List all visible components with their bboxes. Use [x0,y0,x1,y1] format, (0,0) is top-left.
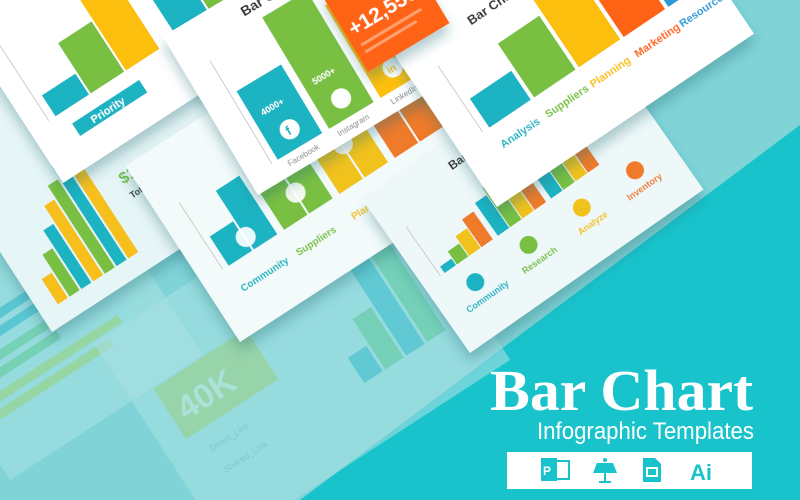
bars [42,166,138,304]
slide: community / research / analyze / inventory: Research [520,245,559,276]
faded slide: 01 02 analysis: 02 [4,232,50,278]
subtitle: Infographic Templates [537,418,754,445]
faded slide: 40K [94,243,510,500]
background: bright teal diagonal [300,125,800,500]
slide: analysis / resource stair chart: Suppliers [543,83,591,121]
slide: analysis / resource stair chart [346,0,754,207]
faded slide: 40K: Direct_Link [208,420,252,454]
icon: powerpoint [541,458,569,481]
bar linkedin: 3500+ [362,34,389,56]
bar facebook: f [283,123,295,138]
slide: community / suppliers / planning / marketing [123,96,452,354]
orange stat panel +12,550 [322,0,449,72]
slide: 120K total impression [0,86,208,344]
stat $16.5K: Total Sales [128,166,173,200]
faded slide: 40K: Shared_Link [222,438,270,475]
label priority: Priority [89,95,128,126]
title: Bar Chart [490,358,754,423]
bar facebook [236,64,322,160]
bar linkedin: in [385,63,399,77]
slide: analysis / resource stair chart: Planning [588,55,633,91]
slide: social (facebook / instagram / linkedin) [159,0,430,208]
slide: analysis / resource stair chart: Analysis [498,116,543,151]
stat $16.5K [118,168,142,198]
labels: Marketing [405,152,451,187]
slide: social (facebook / instagram / linkedin): Facebook [286,142,322,168]
label priority [72,80,147,136]
slide: community / research / analyze / inventory: Inventory [625,171,664,203]
bar instagram: 5000+ [310,65,337,87]
bar instagram [262,0,374,129]
stat $16.5K: $16.5K [116,145,169,188]
slide: community / research / analyze / inventory: Bar Chart [446,130,498,173]
icon: keynote [593,458,617,483]
stat box 120K+ [52,12,221,161]
stat box 120K+: Total Impression [92,84,166,138]
slide: community / research / analyze / inventory: Analyze [576,209,610,237]
faded slide: 01 02 analysis [0,252,202,480]
bar linkedin [325,4,411,98]
bar facebook: 4000+ [259,96,286,118]
label analysis: Analysis [208,14,252,49]
labels: Suppliers [294,224,339,259]
slide: priority / analysis (top-left) [0,0,224,196]
slide: community / research / analyze / inventory: Community [465,278,511,315]
icon: powerpoint: P [543,464,551,478]
icon: illustrator: Ai [690,460,712,485]
slide: community / suppliers / planning / marketing: Bar Chart [225,84,283,129]
labels: Community [239,255,292,295]
slide: social (facebook / instagram / linkedin): Instagram [336,112,371,138]
faded slide: 40K: 40K [170,362,243,428]
label analysis [194,1,269,57]
slide: analysis / resource stair chart: Marketing [633,21,682,60]
labels: Planning [350,191,391,223]
labels [240,206,368,291]
slide: community / research / analyze / inventory [361,107,706,364]
icon circles [466,272,485,292]
stat box 120K+: 120K+ [73,53,160,124]
icons [235,226,256,248]
icon: google slides [643,458,661,482]
software icons bar [507,452,752,489]
slide: social (facebook / instagram / linkedin): LinkedIn [389,83,420,106]
